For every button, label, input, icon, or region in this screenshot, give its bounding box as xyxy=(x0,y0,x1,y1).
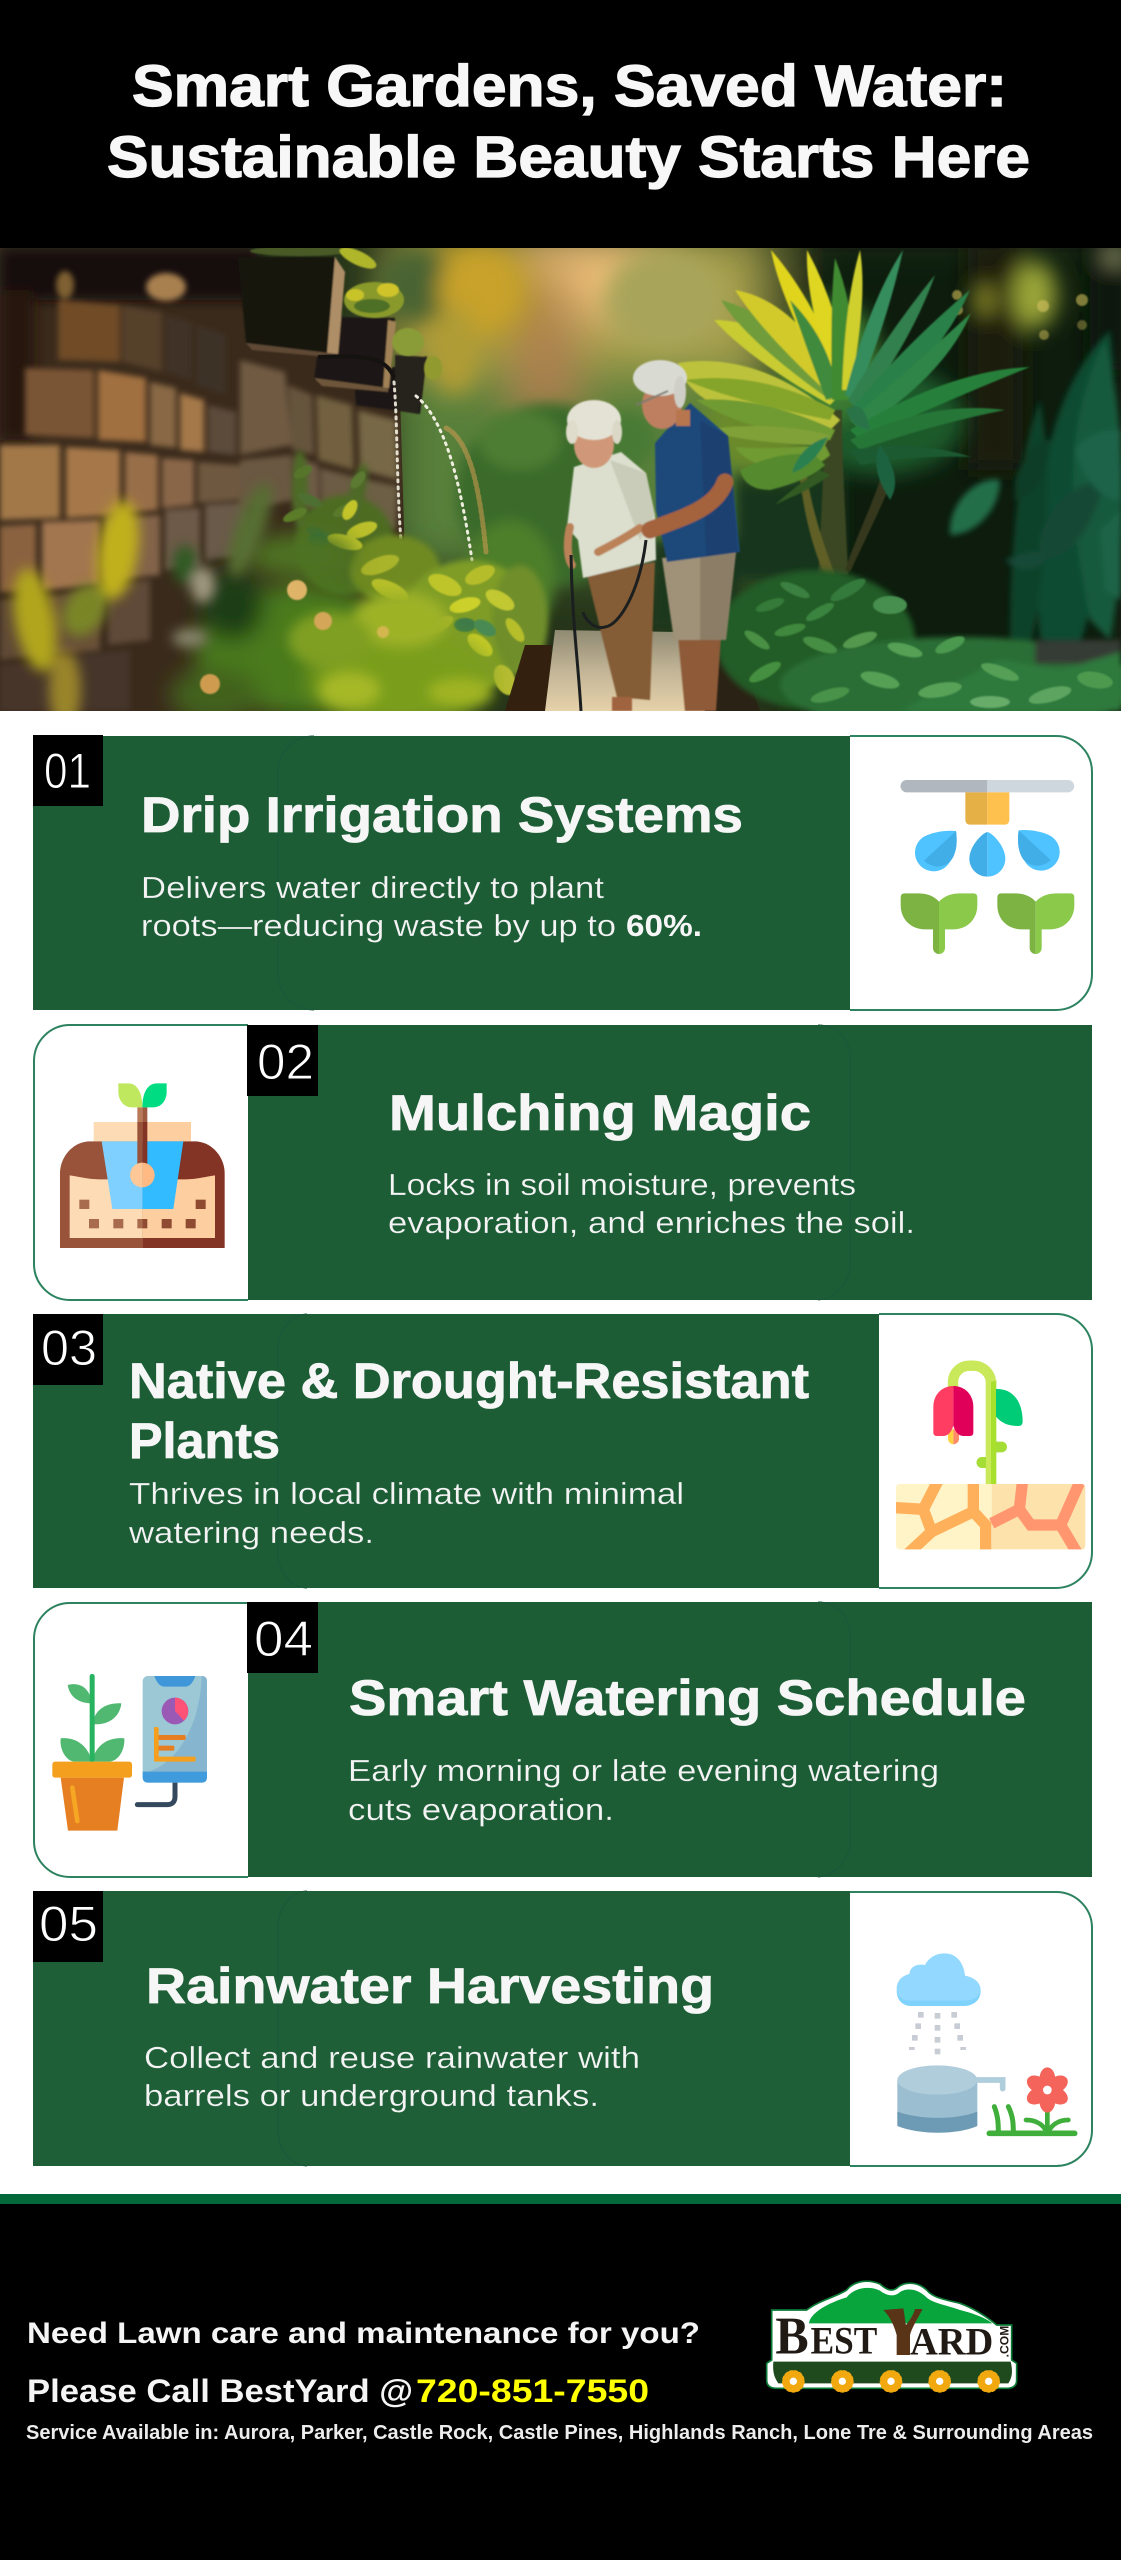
panel: step 5 rainwater harvesting xyxy=(33,1891,1092,2166)
number badge 01: 01 xyxy=(44,743,91,799)
logo: BestYard.com: ARD xyxy=(910,2321,993,2363)
heading: Plants xyxy=(129,1413,280,1469)
description: barrels or underground tanks. xyxy=(144,2078,599,2113)
heading: Mulching Magic xyxy=(389,1085,811,1141)
hero photo: couple watering garden by brick wall xyxy=(0,230,1121,733)
drip tube xyxy=(318,357,394,378)
description: Collect and reuse rainwater with xyxy=(144,2040,640,2075)
couple xyxy=(566,360,740,711)
number badge 03: 03 xyxy=(41,1320,97,1376)
icon: rain cloud, tank and flower xyxy=(896,1953,1078,2136)
description: cuts evaporation. xyxy=(348,1792,614,1827)
logo: BestYard.com: .COM xyxy=(998,2326,1012,2357)
icon: drip emitter, drops and seedlings xyxy=(900,780,1074,954)
phone line: 720-851-7550 xyxy=(416,2373,649,2409)
logo: BestYard.com: EST xyxy=(811,2318,877,2362)
icon: potted plant with phone app xyxy=(52,1674,207,1831)
right foreground bushes xyxy=(719,566,1121,711)
ground shadow right of path xyxy=(704,662,760,711)
bokeh right xyxy=(952,290,1088,340)
description: 60%. xyxy=(626,908,702,943)
water streams xyxy=(394,382,486,560)
description: Locks in soil moisture, prevents xyxy=(388,1167,856,1202)
icon: mulch soil with seedling xyxy=(60,1083,225,1248)
panel: step 2 mulching xyxy=(34,1025,1092,1300)
woman pants xyxy=(587,562,655,700)
far-right tropical leaves xyxy=(950,330,1121,660)
man head xyxy=(642,381,682,429)
description xyxy=(144,2040,640,2113)
number badge 05 xyxy=(33,1891,103,1962)
title: Smart Gardens, Saved Water: xyxy=(132,54,1007,119)
palm plant xyxy=(678,250,1030,575)
footer divider band xyxy=(0,2194,1121,2204)
panel: step 3 native plants xyxy=(33,1314,1092,1588)
man legs and shorts xyxy=(678,636,721,711)
background garden glow xyxy=(390,230,1121,730)
call to action question: Need Lawn care and maintenance for you? xyxy=(27,2317,700,2350)
number badge 03 xyxy=(33,1314,103,1385)
hedge xyxy=(456,403,845,640)
description: evaporation, and enriches the soil. xyxy=(388,1205,915,1240)
hanging yellow foliage xyxy=(250,243,442,380)
description xyxy=(141,870,702,943)
woman legs bottom xyxy=(612,697,632,711)
garden path xyxy=(545,630,712,711)
bokeh dots xyxy=(200,580,389,694)
description: roots—reducing waste by up to xyxy=(141,908,616,943)
title xyxy=(107,54,1030,190)
man shirt xyxy=(655,403,740,562)
logo: BestYard.com xyxy=(767,2281,1017,2391)
description: Early morning or late evening watering xyxy=(348,1753,939,1788)
icon: wilting flower over cracked soil xyxy=(896,1360,1086,1550)
heading xyxy=(129,1353,809,1469)
planters xyxy=(238,257,427,414)
number badge 02: 02 xyxy=(257,1034,314,1090)
woman arm xyxy=(568,527,640,565)
number badge 04: 04 xyxy=(254,1611,313,1667)
description xyxy=(128,1476,684,1550)
header band xyxy=(0,0,1121,248)
description: Delivers water directly to plant xyxy=(141,870,604,905)
woman head xyxy=(574,422,614,468)
panel: step 4 smart watering schedule xyxy=(34,1602,1092,1877)
number badge 02 xyxy=(247,1025,318,1096)
logo: BestYard.com: B xyxy=(775,2307,809,2365)
description: watering needs. xyxy=(128,1515,374,1550)
title: Sustainable Beauty Starts Here xyxy=(107,125,1030,190)
service area: Service Available in: Aurora, Parker, Castle Rock, Castle Pines, Highlands Ranch, Lone Tre & Surrounding Areas xyxy=(26,2422,1093,2444)
number badge 04 xyxy=(247,1602,318,1673)
mid plants in front of wall xyxy=(281,450,548,699)
heading: Rainwater Harvesting xyxy=(146,1958,714,2014)
phone line xyxy=(27,2373,649,2409)
man arm xyxy=(650,482,725,530)
panel: step 1 drip irrigation xyxy=(33,735,1092,1010)
mulch xyxy=(505,645,552,711)
hose xyxy=(571,540,646,711)
blurred foreground foliage xyxy=(170,533,490,730)
number badge 05: 05 xyxy=(39,1896,98,1952)
footer xyxy=(0,2204,1121,2560)
heading: Drip Irrigation Systems xyxy=(141,787,743,843)
description xyxy=(348,1753,939,1827)
woman shirt xyxy=(567,452,656,578)
brick wall xyxy=(0,248,405,711)
phone line: Please Call BestYard @ xyxy=(27,2373,413,2409)
number badge 01 xyxy=(33,735,103,806)
heading: Native & Drought-Resistant xyxy=(129,1353,809,1409)
description xyxy=(388,1167,915,1240)
description: Thrives in local climate with minimal xyxy=(129,1476,684,1511)
heading: Smart Watering Schedule xyxy=(349,1670,1026,1726)
